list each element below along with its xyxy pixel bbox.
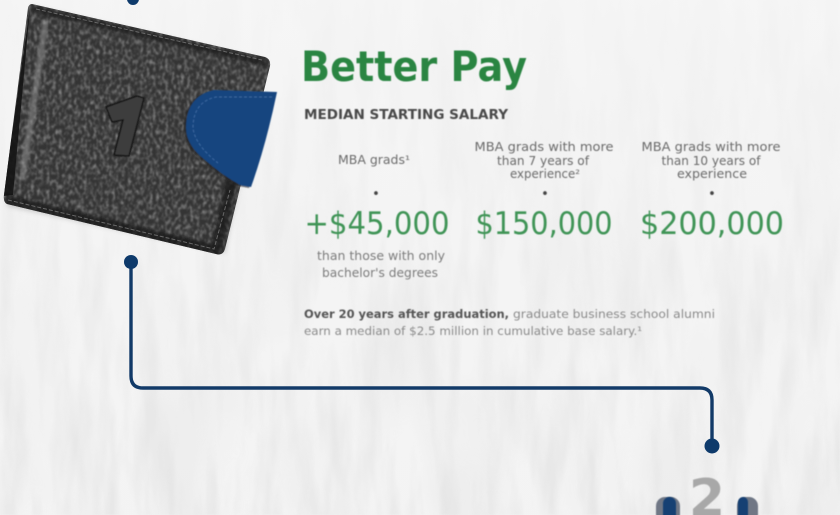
icon: leather wallet with number 1 — [0, 0, 280, 260]
column 1: MBA grads — [304, 153, 450, 280]
column 1: MBA grads: MBA grads¹ — [338, 153, 410, 167]
column 3: more than 10 years: • — [708, 187, 716, 202]
icon: blue wallet clasp — [184, 90, 277, 188]
column 1: MBA grads: • — [372, 187, 380, 202]
icon: next section number 2 with binder rings — [656, 469, 758, 515]
column 1: MBA grads: +$45,000 — [304, 206, 450, 242]
column 2: more than 7 years: $150,000 — [476, 206, 612, 242]
column 3: more than 10 years: experience — [677, 167, 747, 181]
connector line between sections — [124, 255, 720, 454]
column 2: more than 7 years: MBA grads with more — [474, 140, 614, 154]
text block: cumulative salary note — [304, 307, 715, 338]
column 1: MBA grads: than those with only — [317, 249, 445, 263]
column 3: more than 10 years: than 10 years of — [662, 154, 761, 168]
column 3: more than 10 years: $200,000 — [640, 206, 784, 242]
top connector dot — [127, 0, 139, 5]
column 2: more than 7 years: than 7 years of — [497, 154, 590, 168]
column 3: more than 10 years — [640, 140, 784, 242]
column 2: more than 7 years: experience² — [510, 167, 580, 181]
column 2: more than 7 years: • — [541, 187, 549, 202]
column 1: MBA grads: bachelor's degrees — [322, 266, 438, 280]
subheading: median starting salary: MEDIAN STARTING SALARY — [304, 108, 509, 123]
icon: embossed number 1 — [106, 96, 144, 156]
text block: cumulative salary note: earn a median of $2.5 million in cumulative base salary.¹ — [304, 324, 642, 338]
text block: cumulative salary note: graduate business school alumni — [513, 307, 715, 321]
column 3: more than 10 years: MBA grads with more — [642, 140, 780, 154]
text block: cumulative salary note: Over 20 years after graduation, — [304, 307, 509, 321]
column 2: more than 7 years — [474, 140, 614, 242]
heading: Better Pay: Better Pay — [301, 42, 527, 91]
